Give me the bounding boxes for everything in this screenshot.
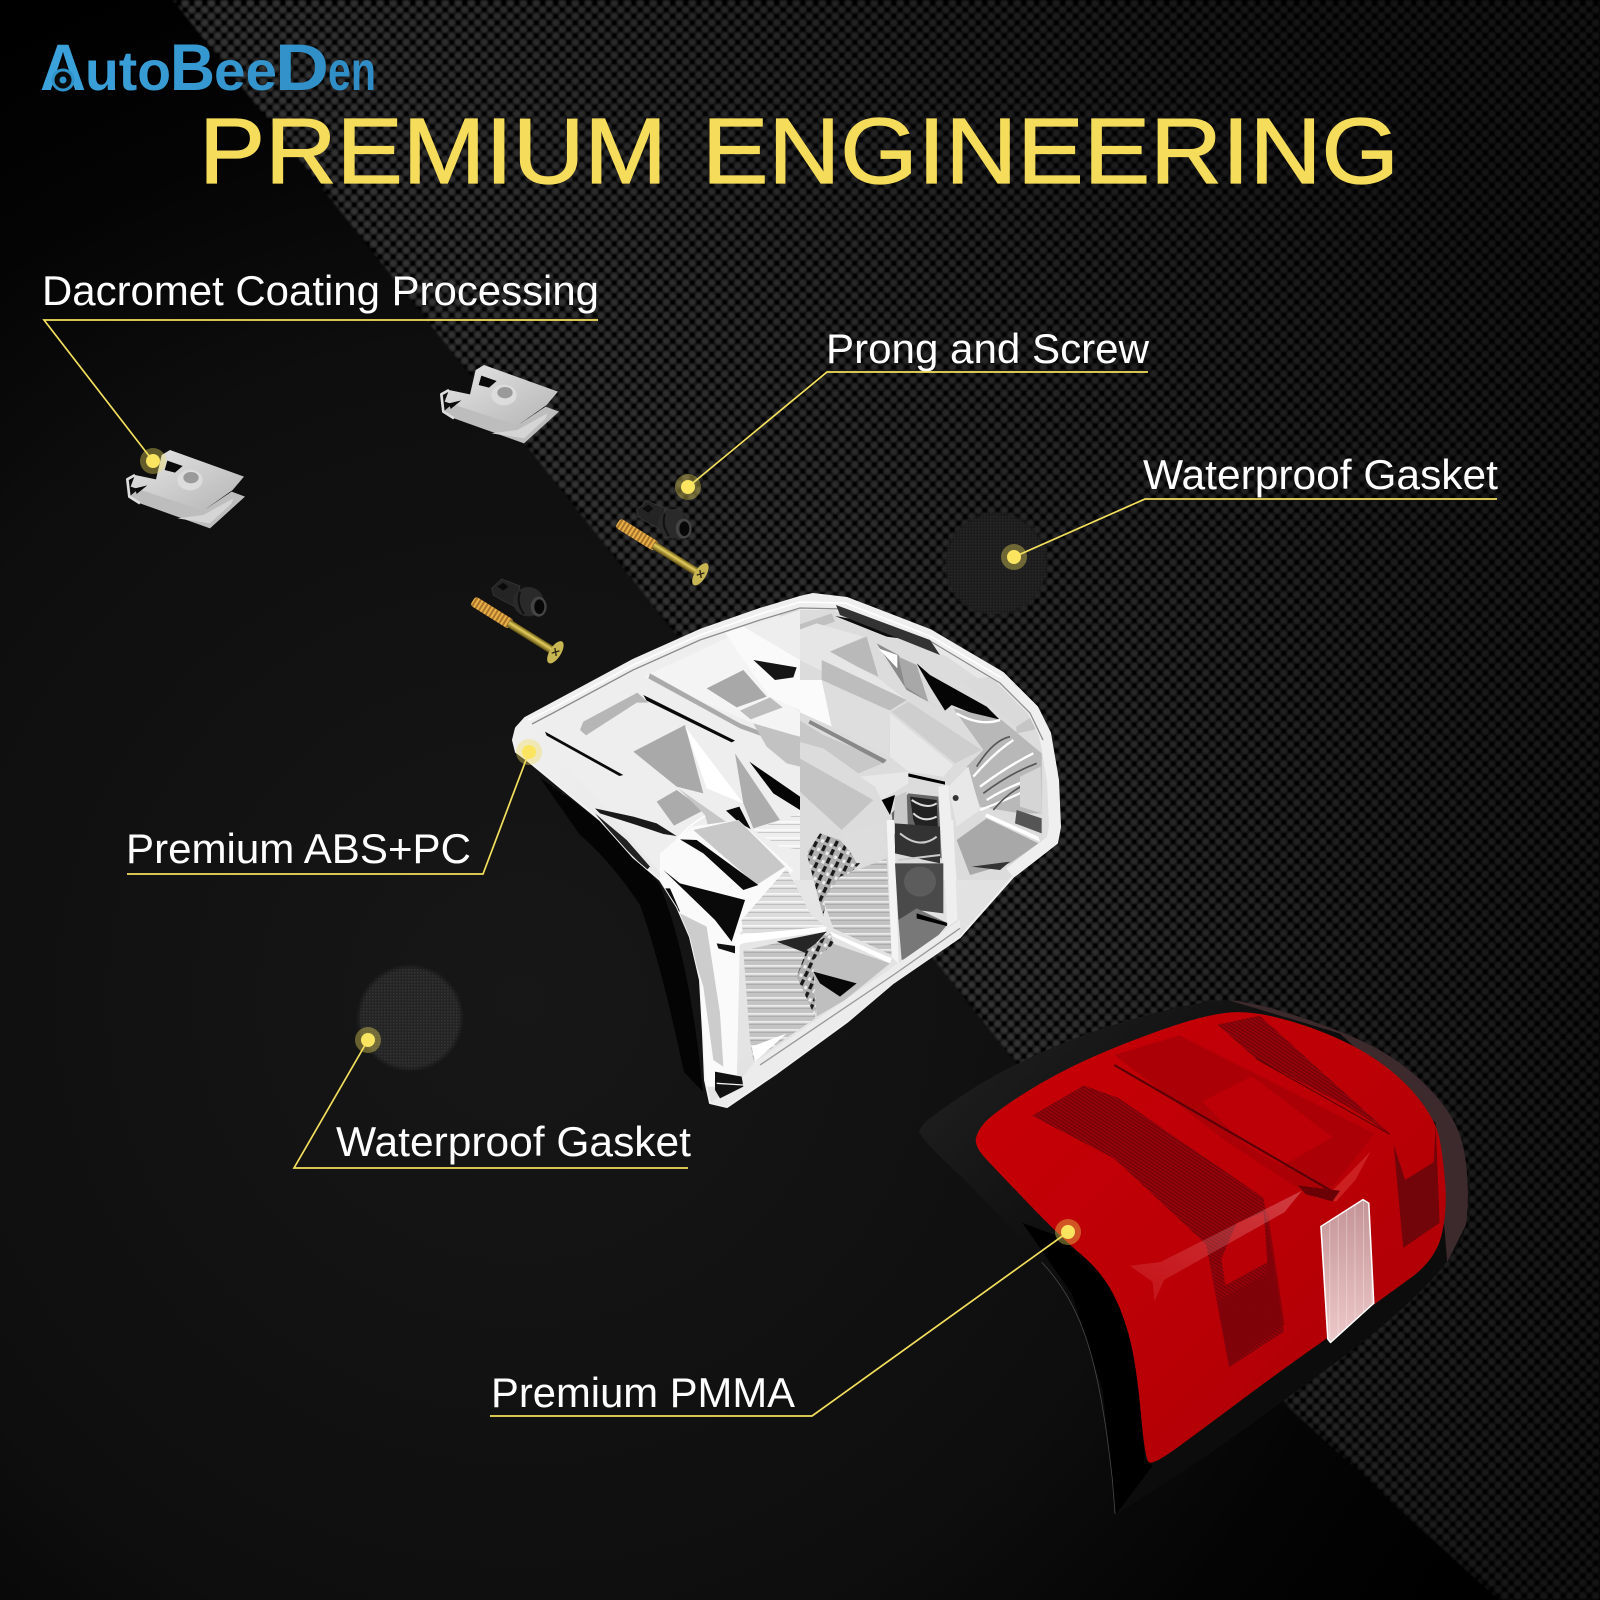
housing deep black band (1022, 1223, 1153, 1514)
zoomed upper-left detail (540, 610, 800, 880)
right dark panel (1394, 1123, 1440, 1248)
callout: Premium ABS+PC: Premium ABS+PC (126, 825, 471, 872)
title: PREMIUM ENGINEERING (199, 99, 1399, 203)
logo: AutoBeeDen: A (40, 30, 86, 104)
callout: Waterproof Gasket right: Waterproof Gasket (1143, 451, 1498, 498)
bright notch in U (1221, 1212, 1267, 1285)
callout: Premium PMMA: Premium PMMA (491, 1369, 795, 1416)
part: metal clip upper (441, 365, 559, 443)
red lens body (976, 1012, 1446, 1463)
part: clear chrome inner lens (513, 594, 1060, 1107)
callout: Prong and Screw (675, 325, 1150, 500)
logo: AutoBeeDen: B (170, 30, 215, 104)
callout: Waterproof Gasket right (1001, 451, 1498, 570)
top right striped panel (1218, 1016, 1390, 1134)
white reflector window (1321, 1200, 1374, 1342)
black housing (919, 1000, 1468, 1514)
title: PREMIUM ENGINEERING: ENGINEERING (702, 99, 1399, 203)
part: waterproof gasket right (942, 510, 1050, 618)
zoomed upper-right detail (780, 610, 1060, 880)
part: metal clip left (127, 450, 245, 528)
logo: AutoBeeDen (40, 30, 376, 104)
part: waterproof gasket lower (356, 964, 464, 1072)
callout: Prong and Screw: Prong and Screw (826, 325, 1150, 372)
logo: AutoBeeDen: D (275, 30, 329, 104)
upper raised band (1114, 1035, 1375, 1191)
callout: Premium PMMA (490, 1219, 1081, 1416)
zoomed lower detail (660, 820, 960, 1107)
callout: Dacromet Coating Processing (42, 267, 599, 474)
title: PREMIUM ENGINEERING: PREMIUM (199, 99, 667, 203)
dark textured panel U (1032, 1085, 1284, 1367)
callout: Waterproof Gasket lower (294, 1027, 691, 1168)
callout: Waterproof Gasket lower: Waterproof Gasket (336, 1118, 691, 1165)
chrome rim (724, 610, 1060, 876)
part: prong and screw lower (466, 579, 567, 666)
logo: AutoBeeDen: uto (85, 39, 171, 102)
logo: AutoBeeDen: ee (214, 39, 277, 102)
callout: Premium ABS+PC (126, 739, 542, 874)
callout: Dacromet Coating Processing: Dacromet Coating Processing (42, 267, 599, 314)
highlights (1130, 1191, 1302, 1301)
part: red tail light outer lens (919, 1000, 1468, 1514)
part: prong and screw upper (611, 501, 712, 588)
logo: AutoBeeDen: en (328, 39, 376, 102)
